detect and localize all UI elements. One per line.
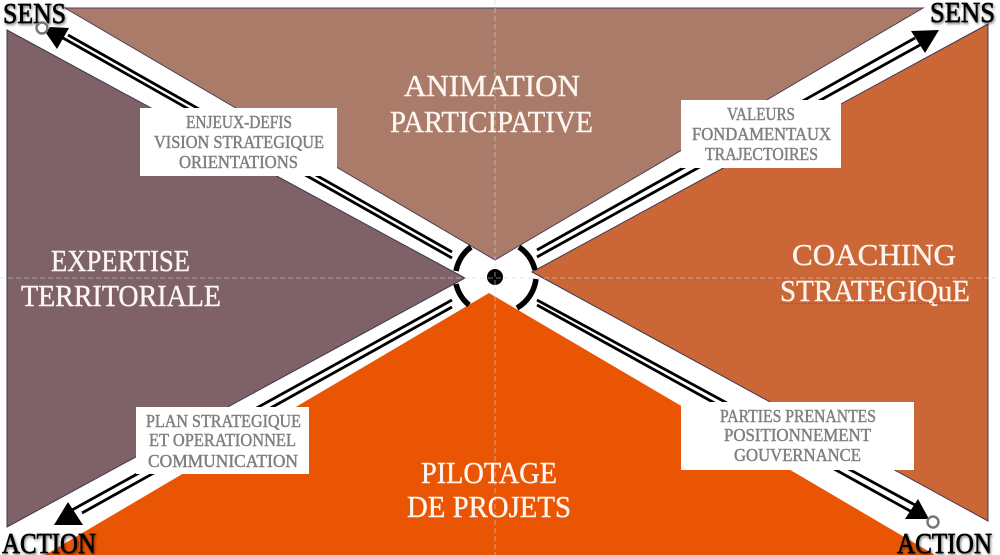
panel: animation participative bbox=[65, 8, 923, 260]
double line arrow shaft: bottom right bbox=[537, 300, 915, 512]
callout: valeurs: TRAJECTOIRES bbox=[705, 144, 818, 164]
heading: coaching strategique: COACHING bbox=[792, 237, 956, 272]
panel: expertise territoriale bbox=[7, 30, 465, 527]
callout: enjeux: ORIENTATIONS bbox=[179, 152, 298, 172]
marker ring: bottom right bbox=[928, 516, 938, 528]
callout: enjeux: VISION STRATEGIQUE bbox=[154, 132, 324, 152]
callout: enjeux: ENJEUX-DEFIS bbox=[186, 112, 292, 132]
heading: expertise territoriale: EXPERTISE bbox=[51, 243, 190, 278]
heading: coaching strategique bbox=[780, 237, 970, 308]
callout: valeurs bbox=[681, 100, 841, 168]
heading: expertise territoriale bbox=[21, 243, 221, 313]
double line arrow shaft: top right bbox=[537, 38, 920, 257]
heading: pilotage de projets: DE PROJETS bbox=[407, 489, 571, 524]
panel: pilotage de projets bbox=[45, 293, 935, 555]
arrowhead: top right bbox=[911, 30, 939, 53]
heading: pilotage de projets: PILOTAGE bbox=[421, 455, 557, 490]
callout: plan strategique: ET OPERATIONNEL bbox=[149, 430, 296, 450]
callout: enjeux bbox=[140, 108, 337, 176]
heading: animation participative: ANIMATION bbox=[404, 68, 580, 103]
callout: valeurs: FONDAMENTAUX bbox=[692, 124, 831, 144]
double line arrow shaft: bottom left bbox=[72, 300, 452, 513]
arrowhead: bottom left bbox=[54, 502, 83, 525]
heading: expertise territoriale: TERRITORIALE bbox=[21, 278, 221, 313]
double line arrow shaft: top left bbox=[63, 35, 452, 258]
heading: animation participative: PARTICIPATIVE bbox=[390, 104, 593, 139]
callout: plan strategique: PLAN STRATEGIQUE bbox=[146, 411, 301, 431]
callout: parties prenantes: POSITIONNEMENT bbox=[724, 425, 871, 445]
central target arcs bbox=[456, 247, 536, 308]
callout: parties prenantes: PARTIES PRENANTES bbox=[720, 406, 876, 426]
panel: coaching strategique bbox=[532, 24, 988, 521]
marker ring: top left bbox=[36, 22, 48, 34]
callout: plan strategique: COMMUNICATION bbox=[148, 451, 298, 471]
callout: plan strategique bbox=[136, 407, 309, 474]
arrowhead: bottom right bbox=[905, 499, 929, 519]
callout: valeurs: VALEURS bbox=[727, 104, 795, 124]
central dot bbox=[487, 269, 503, 285]
arrowhead: top left bbox=[46, 27, 69, 49]
callout: parties prenantes bbox=[681, 402, 914, 470]
heading: pilotage de projets bbox=[407, 455, 571, 524]
callout: parties prenantes: GOUVERNANCE bbox=[734, 445, 861, 465]
heading: animation participative bbox=[390, 68, 593, 139]
heading: coaching strategique: STRATEGIQuE bbox=[780, 273, 970, 308]
